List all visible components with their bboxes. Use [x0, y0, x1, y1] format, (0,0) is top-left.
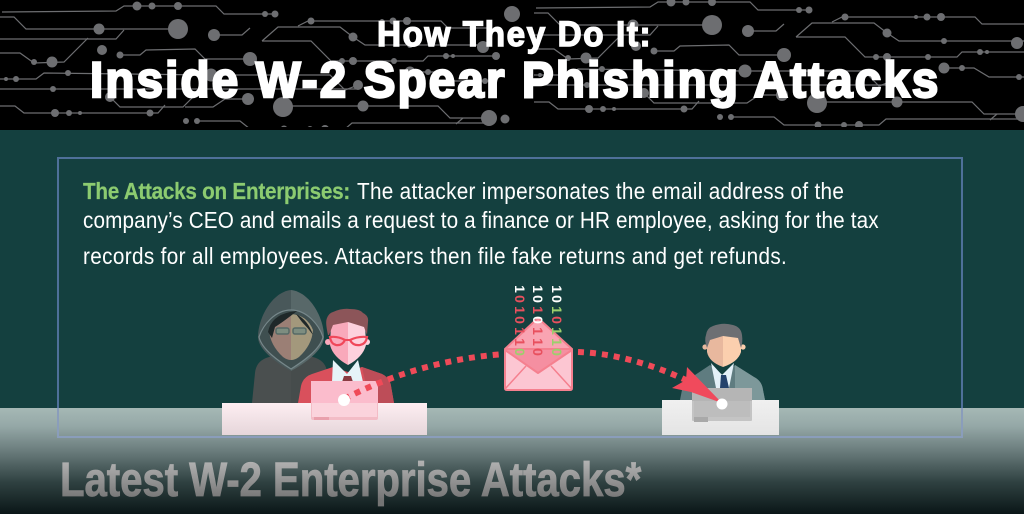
connector dot: victim laptop — [716, 398, 728, 410]
binary digits: 1 — [549, 338, 565, 346]
binary digits: 0 — [512, 295, 528, 303]
binary digits: 1 — [530, 338, 546, 346]
title — [90, 15, 938, 108]
binary digits: 0 — [549, 295, 565, 303]
binary digits: 0 — [530, 316, 546, 324]
binary digits: 0 — [530, 348, 546, 356]
envelope inner fold — [506, 350, 571, 373]
teal background — [0, 130, 1024, 410]
desk: attacker — [222, 403, 427, 435]
intro text block: company’s CEO and emails a request to a finance or HR employee, asking for the tax — [83, 207, 879, 233]
binary digits: 1 — [512, 338, 528, 346]
binary digits: 1 — [530, 327, 546, 335]
header band with circuit pattern — [0, 0, 1024, 133]
binary digits: 1 — [512, 285, 528, 293]
binary digits: 1 — [549, 327, 565, 335]
icon: hooded attacker — [252, 290, 330, 403]
binary digits — [512, 285, 565, 356]
intro text block — [83, 178, 879, 269]
binary digits: 1 — [530, 306, 546, 314]
binary digits: 1 — [530, 285, 546, 293]
dotted arrow path from attacker to envelope — [344, 354, 505, 399]
envelope flap — [505, 318, 572, 349]
binary digits: 0 — [549, 348, 565, 356]
laptop: attacker — [311, 381, 378, 420]
intro text block: records for all employees. Attackers then file fake returns and get refunds. — [83, 243, 787, 269]
title: How They Do It: — [377, 15, 651, 54]
floor gradient — [0, 408, 1024, 514]
binary digits: 1 — [549, 306, 565, 314]
envelope body — [505, 350, 572, 390]
connector dot: attacker laptop — [338, 394, 350, 406]
desk: victim — [662, 400, 779, 435]
arrowhead — [672, 367, 722, 403]
icon: victim employee — [680, 324, 765, 400]
binary digits: 0 — [512, 316, 528, 324]
binary digits: 0 — [530, 295, 546, 303]
binary digits: 1 — [512, 306, 528, 314]
binary digits: 0 — [549, 316, 565, 324]
laptop: victim — [692, 388, 752, 422]
envelope with binary data — [505, 285, 572, 390]
icon: impersonator in red suit — [298, 309, 394, 403]
intro text block: The attacker impersonates the email address of the — [357, 178, 844, 204]
binary digits: 0 — [512, 348, 528, 356]
title: Inside W-2 Spear Phishing Attacks — [90, 53, 938, 108]
panel border — [58, 158, 962, 437]
dotted arrow path from envelope to victim — [578, 352, 688, 381]
binary digits: 1 — [549, 285, 565, 293]
binary digits: 1 — [512, 327, 528, 335]
intro text block: The Attacks on Enterprises: — [83, 178, 350, 204]
section heading: Latest W-2 Enterprise Attacks* — [60, 454, 642, 507]
